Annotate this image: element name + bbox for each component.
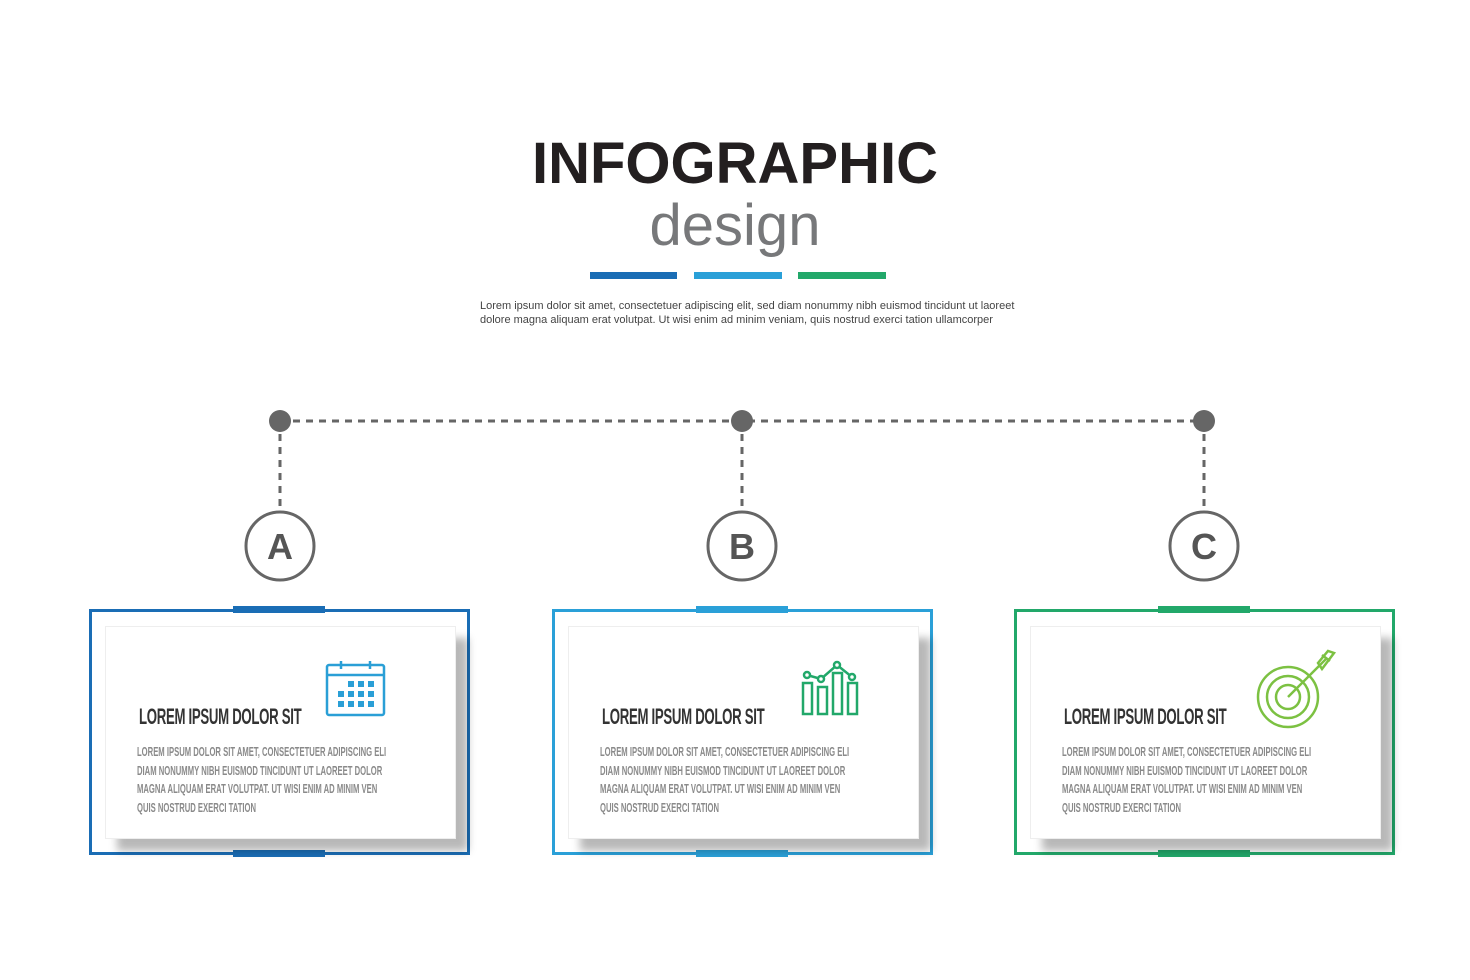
intro paragraph [480, 300, 1014, 326]
intro paragraph: dolore magna aliquam erat volutpat. Ut wisi enim ad minim veniam, quis nostrud exerci tation ullamcorper [480, 314, 993, 326]
subtitle: design [650, 193, 820, 258]
body B [600, 744, 849, 814]
body B: QUIS NOSTRUD EXERCI TATION [600, 800, 719, 814]
heading C: LOREM IPSUM DOLOR SIT [1064, 704, 1226, 729]
body B: LOREM IPSUM DOLOR SIT AMET, CONSECTETUER ADIPISCING ELI [600, 744, 849, 759]
icon: target [1256, 650, 1336, 728]
body B: MAGNA ALIQUAM ERAT VOLUTPAT. UT WISI ENIM AD MINIM VEN [600, 781, 840, 796]
heading B: LOREM IPSUM DOLOR SIT [602, 704, 764, 729]
letter circle B [708, 512, 776, 580]
body A [137, 744, 386, 814]
body C [1062, 744, 1311, 814]
letter circle C: C [1191, 526, 1217, 567]
body A: QUIS NOSTRUD EXERCI TATION [137, 800, 256, 814]
panel: B [552, 606, 936, 857]
icon: bar chart [802, 660, 858, 716]
letter circle B: B [729, 526, 755, 567]
body A: MAGNA ALIQUAM ERAT VOLUTPAT. UT WISI ENIM AD MINIM VEN [137, 781, 377, 796]
body C: QUIS NOSTRUD EXERCI TATION [1062, 800, 1181, 814]
intro paragraph: Lorem ipsum dolor sit amet, consectetuer adipiscing elit, sed diam nonummy nibh euismod tincidunt ut laoreet [480, 300, 1014, 312]
body B: DIAM NONUMMY NIBH EUISMOD TINCIDUNT UT LAOREET DOLOR [600, 762, 845, 778]
heading A: LOREM IPSUM DOLOR SIT [139, 704, 301, 729]
letter circle C [1170, 512, 1238, 580]
body A: LOREM IPSUM DOLOR SIT AMET, CONSECTETUER ADIPISCING ELI [137, 744, 386, 759]
panel: C [1014, 606, 1398, 857]
body A: DIAM NONUMMY NIBH EUISMOD TINCIDUNT UT LAOREET DOLOR [137, 762, 382, 778]
letter circle A: A [267, 526, 293, 567]
icon: calendar [326, 661, 386, 716]
panel: A [89, 606, 473, 857]
color bars [590, 272, 886, 279]
title: INFOGRAPHIC [532, 131, 938, 196]
letter circle A [246, 512, 314, 580]
body C: MAGNA ALIQUAM ERAT VOLUTPAT. UT WISI ENIM AD MINIM VEN [1062, 781, 1302, 796]
body C: DIAM NONUMMY NIBH EUISMOD TINCIDUNT UT LAOREET DOLOR [1062, 762, 1307, 778]
connector diagram [244, 410, 1240, 582]
body C: LOREM IPSUM DOLOR SIT AMET, CONSECTETUER ADIPISCING ELI [1062, 744, 1311, 759]
